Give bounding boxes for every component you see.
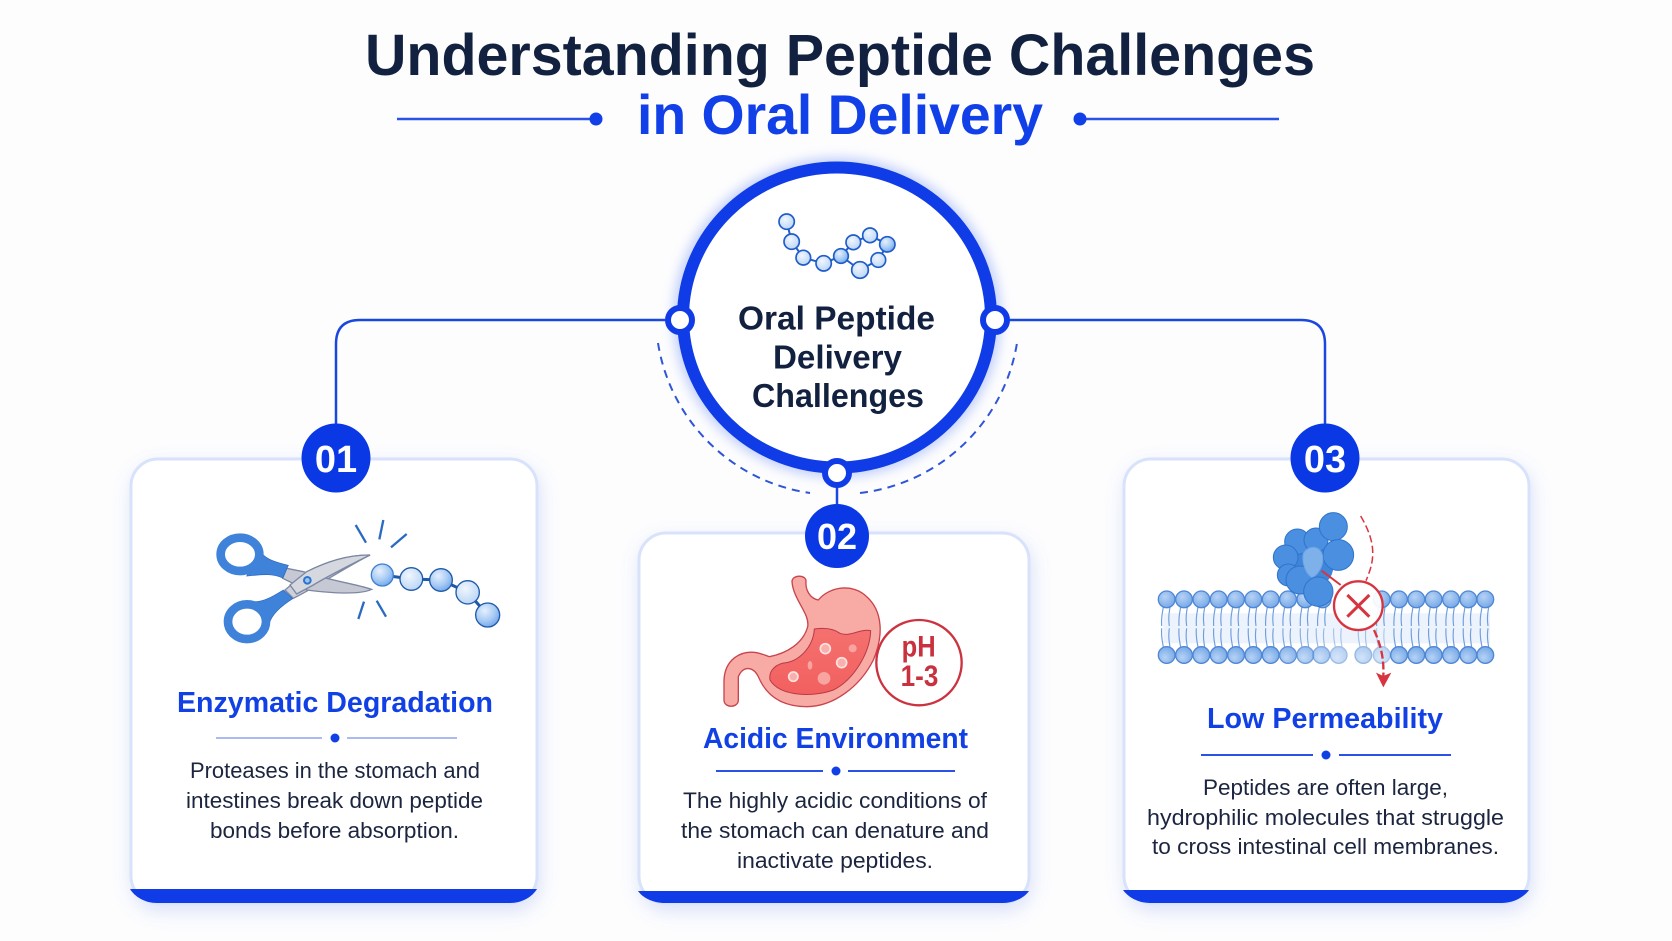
badge 02: 02	[817, 516, 857, 557]
title: Understanding Peptide Challenges	[365, 23, 1315, 88]
heading: Enzymatic Degradation	[177, 687, 493, 719]
heading: Acidic Environment	[703, 723, 968, 755]
title: in Oral Delivery	[637, 83, 1043, 146]
accent bar	[130, 889, 537, 903]
connector lines	[336, 320, 1325, 510]
panel: acidic environment	[638, 504, 1029, 903]
badge 02	[805, 504, 869, 568]
badge 03	[1290, 424, 1360, 492]
body text	[681, 788, 989, 873]
dashed arc around hub	[658, 343, 1017, 493]
body text	[1147, 775, 1504, 859]
body text: intestines break down peptide	[186, 788, 483, 813]
divider	[716, 766, 955, 776]
body text	[186, 758, 483, 843]
body text: hydrophilic molecules that struggle	[1147, 805, 1504, 830]
panel: enzymatic degradation	[130, 424, 537, 903]
hub label	[738, 300, 935, 414]
badge 01	[302, 424, 370, 492]
body text: Peptides are often large,	[1203, 775, 1448, 800]
hub label: Oral Peptide	[738, 300, 935, 336]
icon: membrane barrier	[1158, 513, 1494, 687]
divider	[1201, 750, 1451, 760]
heading: Low Permeability	[1207, 703, 1443, 735]
hub label: Delivery	[773, 338, 903, 376]
badge 03: 03	[1304, 439, 1346, 481]
icon: stomach with pH badge	[724, 576, 962, 707]
hub circle	[668, 166, 1007, 485]
body text: bonds before absorption.	[210, 818, 459, 843]
body text: inactivate peptides.	[737, 848, 933, 873]
icon: stomach with pH badge: 1-3	[901, 660, 938, 693]
accent bar	[1123, 890, 1529, 903]
body text: to cross intestinal cell membranes.	[1152, 834, 1499, 859]
divider	[216, 734, 457, 742]
body text: Proteases in the stomach and	[190, 758, 480, 783]
icon: scissors cutting peptide	[221, 520, 500, 639]
connector nodes	[668, 308, 1007, 485]
body text: the stomach can denature and	[681, 818, 989, 843]
body text: The highly acidic conditions of	[683, 788, 988, 813]
badge 01: 01	[315, 439, 357, 481]
accent bar	[638, 891, 1029, 903]
icon: stomach with pH badge: pH	[902, 631, 936, 664]
title	[365, 23, 1315, 146]
icon: peptide chain	[779, 214, 895, 278]
hub label: Challenges	[752, 377, 924, 414]
panel: low permeability	[1123, 424, 1529, 903]
